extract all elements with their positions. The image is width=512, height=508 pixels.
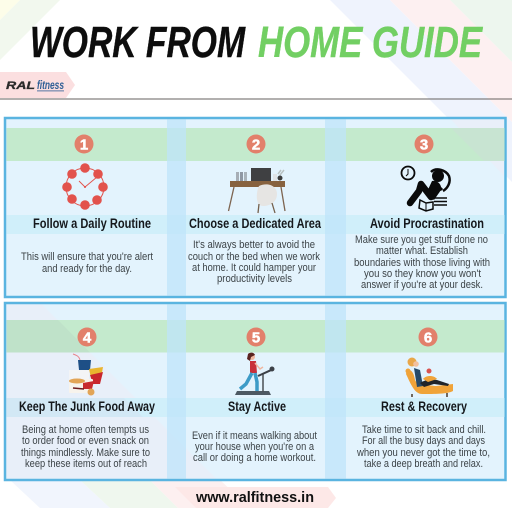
card 3	[354, 134, 490, 291]
number badge 2	[246, 134, 266, 154]
text block: card 6: For all the busy days and days	[362, 435, 485, 447]
number badge 1: 1	[80, 136, 88, 154]
logo tag: RAL	[6, 80, 35, 92]
number badge 1	[74, 134, 94, 154]
number badge 3: 3	[420, 136, 428, 154]
heading: Choose a Dedicated Area: Choose a Dedicated Area	[189, 216, 321, 231]
footer URL tag	[175, 487, 336, 508]
text block: card 5: your house when you're on a	[195, 441, 315, 453]
number badge 6	[418, 328, 438, 346]
icon: desk and chair	[228, 168, 285, 213]
heading: Rest & Recovery: Rest & Recovery	[381, 399, 467, 414]
card 4	[19, 328, 155, 470]
number badge 3	[414, 134, 434, 154]
text block: card 6: Take time to sit back and chill.	[362, 424, 486, 436]
icon: procrastinating person	[402, 166, 450, 211]
number badge 5: 5	[252, 330, 260, 346]
number badge 4: 4	[83, 330, 92, 346]
card 2	[188, 134, 321, 285]
heading: Stay Active: Stay Active	[228, 399, 286, 414]
text block: card 3	[354, 234, 490, 291]
text block: card 2: It's always better to avoid the	[193, 239, 315, 251]
card 6	[356, 328, 490, 470]
text block: card 2	[188, 239, 320, 285]
icon: person resting on sofa	[406, 358, 453, 397]
panel: bottom row	[5, 303, 506, 480]
text block: card 1: This will ensure that you're alert	[21, 251, 153, 263]
text block: card 4: to order food or even snack on	[22, 435, 149, 447]
text block: card 6	[356, 424, 490, 470]
logo tag: fitness	[37, 78, 64, 92]
heading: Avoid Procrastination: Avoid Procrastination	[370, 216, 484, 231]
title	[30, 18, 483, 67]
text block: card 3: boundaries with those living with	[354, 257, 490, 269]
text block: card 4: keep these items out of reach	[25, 458, 147, 470]
number badge 4	[78, 328, 96, 346]
text block: card 2: at home. It could hamper your	[192, 262, 316, 274]
panel: top row	[5, 118, 506, 297]
logo tag	[0, 72, 75, 98]
title: WORK FROM	[30, 18, 246, 67]
icon: clock routine	[63, 164, 107, 209]
text block: card 2: productivity levels	[217, 273, 292, 285]
text block: card 1	[21, 251, 153, 275]
text block: card 3: matter what. Establish	[376, 245, 468, 257]
icon: junk food	[69, 354, 103, 396]
text block: card 6: take a deep breath and relax.	[364, 458, 483, 470]
text block: card 5: call or doing a home workout.	[193, 452, 316, 464]
text block: card 6: when you never got the time to,	[356, 447, 490, 459]
text block: card 4: Being at home often tempts us	[22, 424, 149, 436]
heading: Follow a Daily Routine: Follow a Daily Routine	[33, 216, 151, 231]
text block: card 3: Make sure you get stuff done no	[355, 234, 488, 246]
card 5	[192, 328, 317, 464]
heading: Keep The Junk Food Away: Keep The Junk Food Away	[19, 399, 155, 414]
text block: card 3: you so they know you won't	[364, 268, 481, 280]
text block: card 4	[21, 424, 150, 470]
footer URL tag: www.ralfitness.in	[195, 490, 314, 506]
text block: card 2: couch or the bed when we work	[188, 251, 320, 263]
text block: card 1: and ready for the day.	[42, 263, 132, 275]
card 1	[21, 134, 153, 275]
text block: card 4: things mindlessly. Make sure to	[21, 447, 150, 459]
text block: card 5	[192, 430, 317, 464]
number badge 6: 6	[424, 330, 432, 346]
icon: person on treadmill	[235, 353, 274, 395]
text block: card 3: answer if you're at your desk.	[361, 279, 483, 291]
text block: card 5: Even if it means walking about	[192, 430, 317, 442]
number badge 2: 2	[252, 136, 260, 154]
